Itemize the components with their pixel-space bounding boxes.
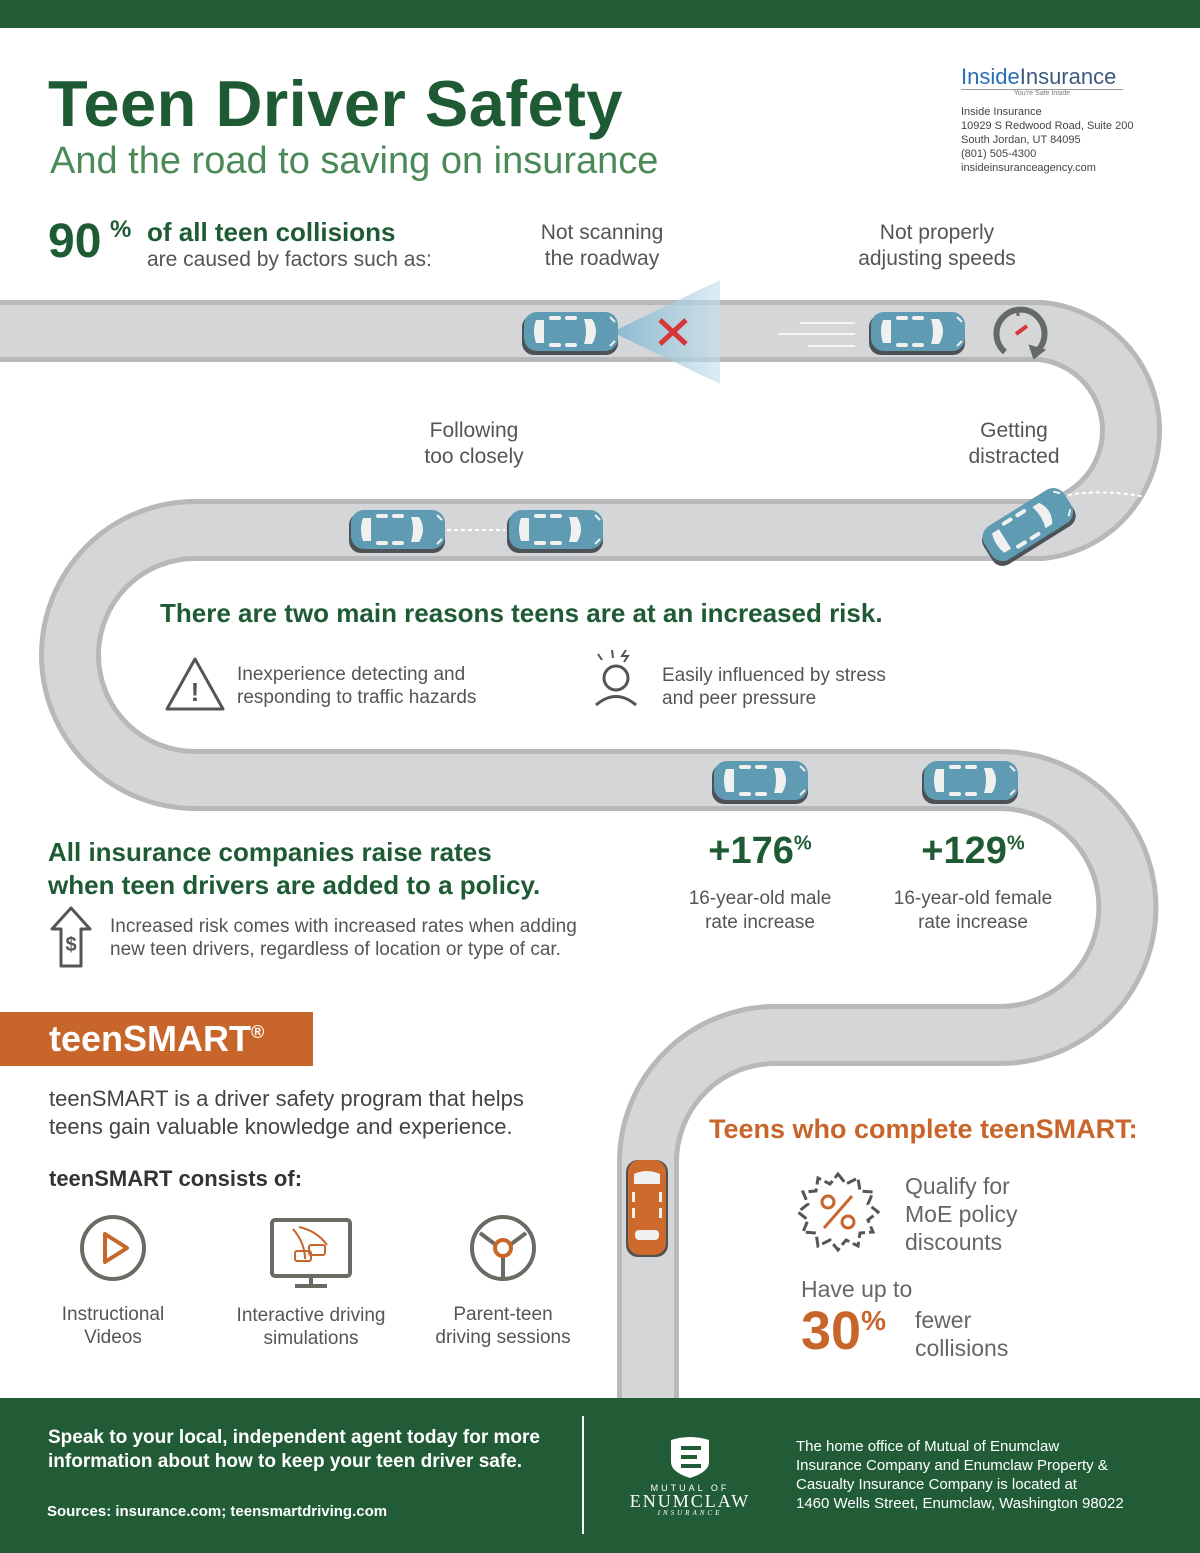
label: distracted: distracted [968, 445, 1060, 468]
footer address: The home office of Mutual of Enumclaw [796, 1438, 1059, 1455]
reason 1: ! [191, 677, 199, 707]
car: distracted [976, 483, 1160, 570]
logo: Inside Insurance: InsideInsurance [961, 64, 1116, 89]
consists heading: teenSMART consists of: [49, 1166, 302, 1191]
cars: rate row [712, 761, 1018, 804]
cars: following [349, 510, 603, 553]
stat +176%: rate increase [705, 912, 815, 933]
reason 1 [166, 657, 476, 710]
logo: Inside Insurance: South Jordan, UT 84095 [961, 134, 1081, 146]
stat +176%: 16-year-old male [689, 888, 831, 909]
logo: Inside Insurance: insideinsuranceagency.com [961, 162, 1096, 174]
top bar [0, 0, 1200, 28]
footer call to action: information about how to keep your teen driver safe. [48, 1451, 522, 1472]
reason 2 [595, 650, 886, 709]
heading: teens who complete: Teens who complete teenSMART: [709, 1114, 1138, 1144]
heading: rates [48, 837, 540, 900]
footer address [796, 1438, 1124, 1512]
benefit: discounts: discounts [905, 1229, 1002, 1255]
item: simulations: simulations [263, 1328, 359, 1349]
car: speeding [869, 312, 965, 355]
stat +129%: +129% [921, 830, 1025, 872]
logo: Inside Insurance: (801) 505-4300 [961, 148, 1036, 160]
item: simulations: Interactive driving [237, 1305, 385, 1326]
logo: Inside Insurance: You're Safe Inside [1014, 90, 1070, 97]
logo: Inside Insurance: Inside Insurance [961, 106, 1042, 118]
logo: Mutual of Enumclaw: MUTUAL OF [651, 1483, 729, 1493]
icon: scanning cone [612, 280, 720, 384]
stat +129% [894, 830, 1052, 933]
rate text with icon: new teen drivers, regardless of location or type of car. [110, 939, 561, 960]
rate text with icon [50, 906, 577, 968]
teenSMART banner: teenSMART® [49, 1018, 264, 1059]
label: not scanning: Not scanning [541, 221, 663, 244]
benefit: discounts: MoE policy [905, 1201, 1017, 1227]
subtitle: And the road to saving on insurance [50, 140, 658, 182]
stat 90%: of all teen collisions [147, 217, 396, 247]
item: simulations [237, 1218, 385, 1349]
item: parent-teen: Parent-teen [453, 1304, 553, 1325]
footer address: 1460 Wells Street, Enumclaw, Washington 98022 [796, 1495, 1124, 1512]
heading: two reasons: There are two main reasons teens are at an increased risk. [160, 598, 883, 628]
stat 90%: 90 [48, 215, 101, 268]
benefit: fewer collisions: Have up to [801, 1276, 912, 1302]
label: speeds: adjusting speeds [858, 247, 1016, 270]
logo: Inside Insurance: 10929 S Redwood Road, Suite 200 [961, 120, 1133, 132]
benefit: discounts: Qualify for [905, 1173, 1010, 1199]
stat 90%: are caused by factors such as: [147, 248, 432, 271]
item: videos: Instructional [62, 1304, 164, 1325]
label: not scanning: the roadway [545, 247, 659, 270]
label: not scanning [541, 221, 663, 270]
logo: Mutual of Enumclaw [630, 1437, 750, 1517]
car: scanning [522, 312, 618, 355]
heading: rates: when teen drivers are added to a policy. [48, 870, 540, 900]
label: speeds: Not properly [880, 221, 994, 244]
item: parent-teen: driving sessions [435, 1327, 571, 1348]
heading: rates: All insurance companies raise rates [48, 837, 492, 867]
teenSMART description [49, 1086, 524, 1139]
benefit: fewer collisions [801, 1276, 1008, 1361]
stat 90%: % [110, 216, 131, 243]
reason 2: Easily influenced by stress [662, 665, 886, 686]
sources: Sources: insurance.com; teensmartdriving.com [47, 1503, 387, 1520]
stat +129%: 16-year-old female [894, 888, 1052, 909]
item: videos [62, 1215, 164, 1348]
footer address: Casualty Insurance Company is located at [796, 1476, 1077, 1493]
footer call to action: Speak to your local, independent agent today for more [48, 1427, 540, 1448]
teenSMART banner [0, 1012, 313, 1066]
teenSMART description: teenSMART is a driver safety program that helps [49, 1086, 524, 1111]
label: following [424, 419, 524, 468]
label: distracted [968, 419, 1060, 468]
label: speeds [858, 221, 1016, 270]
icon: speedometer [997, 310, 1044, 358]
reason 1: Inexperience detecting and responding to traffic hazards [237, 664, 476, 708]
benefit: fewer collisions: collisions [915, 1335, 1008, 1361]
car: orange [626, 1160, 668, 1257]
benefit: discounts [798, 1172, 1018, 1255]
benefit: fewer collisions: fewer [915, 1307, 971, 1333]
label: following: Following [430, 419, 518, 442]
logo: Inside Insurance [961, 64, 1134, 174]
stat 90% [48, 215, 432, 271]
stat +176%: +176% [708, 830, 812, 872]
footer [0, 1398, 1200, 1553]
footer call to action [48, 1427, 540, 1472]
rate text with icon: $ [65, 934, 77, 956]
item: videos: Videos [84, 1327, 142, 1348]
benefit: fewer collisions: 30% [801, 1301, 886, 1361]
reason 2: and peer pressure [662, 688, 816, 709]
logo: Mutual of Enumclaw: INSURANCE [658, 1509, 722, 1517]
stat +129%: rate increase [918, 912, 1028, 933]
teenSMART description: teens gain valuable knowledge and experience. [49, 1114, 513, 1139]
label: distracted: Getting [980, 419, 1048, 442]
footer address: Insurance Company and Enumclaw Property & [796, 1457, 1108, 1474]
speed lines [778, 323, 855, 346]
stat +176% [689, 830, 831, 933]
label: following: too closely [424, 445, 524, 468]
rate text with icon: Increased risk comes with increased rates when adding [110, 916, 577, 937]
logo: Mutual of Enumclaw: ENUMCLAW [630, 1491, 750, 1511]
item: parent-teen [435, 1215, 571, 1348]
title: Teen Driver Safety [48, 67, 623, 140]
